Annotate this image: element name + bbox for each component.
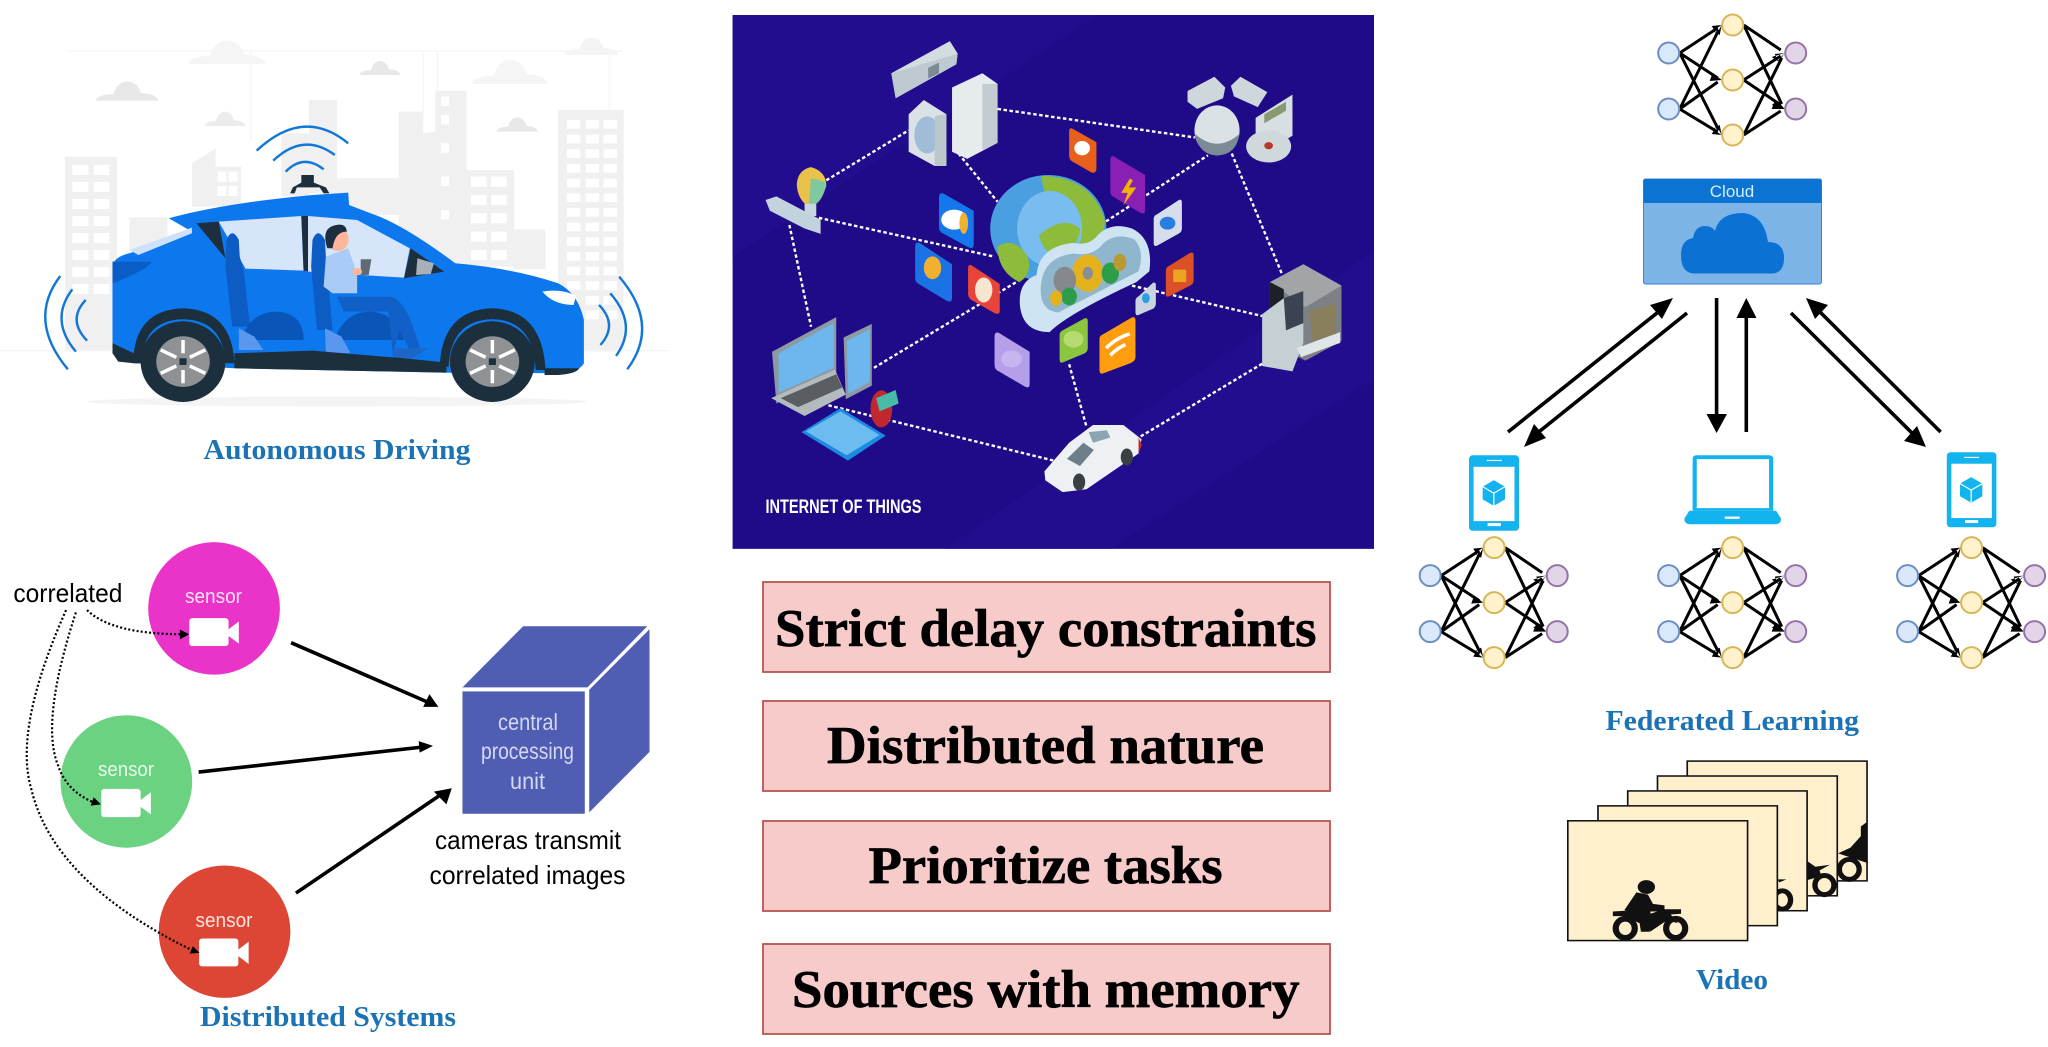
caption: cameras bbox=[430, 825, 626, 890]
cloud with gears bbox=[1020, 226, 1150, 332]
city skyline background bbox=[65, 91, 624, 352]
dotted arrow tips bbox=[91, 630, 200, 954]
cube text: central bbox=[498, 709, 558, 735]
frame 2 bbox=[1598, 806, 1777, 926]
sensor circles bbox=[60, 542, 290, 998]
seats and driver bbox=[225, 225, 429, 358]
data arrows bbox=[199, 643, 442, 893]
arrowheads bbox=[1524, 298, 1926, 447]
panel: autonomous driving bbox=[0, 38, 670, 407]
challenge box: distributed nature: Distributed nature bbox=[827, 717, 1264, 775]
frame 1 bbox=[1568, 821, 1748, 941]
tile glyphs bbox=[924, 141, 1186, 367]
device: laptop bbox=[1684, 455, 1781, 524]
neural network: global model bbox=[1658, 14, 1806, 146]
panel background bbox=[733, 15, 1374, 549]
globe bbox=[990, 175, 1106, 282]
arrowheads bbox=[419, 694, 452, 804]
label: sensor red: sensor bbox=[196, 910, 253, 932]
heading: video: Video bbox=[1696, 965, 1768, 996]
frame 3 bbox=[1628, 791, 1807, 911]
signal waves: roof bbox=[257, 127, 348, 172]
smart lock and safe bbox=[1262, 264, 1341, 371]
camera icons bbox=[101, 618, 249, 966]
signal waves: rear bbox=[45, 276, 87, 369]
caption: cameras: correlated images bbox=[430, 860, 626, 890]
panel: internet of things bbox=[733, 15, 1374, 549]
cloud server bbox=[1644, 179, 1822, 284]
video frames stack bbox=[1568, 761, 1867, 941]
federated exchange arrows bbox=[1508, 298, 1941, 437]
clouds bbox=[0, 38, 670, 351]
smartwatch bbox=[870, 390, 899, 427]
frame 4 bbox=[1657, 776, 1837, 896]
challenge box: prioritize tasks: Prioritize tasks bbox=[868, 837, 1222, 895]
central processing unit cube bbox=[462, 626, 650, 814]
neural network: right client bbox=[1897, 537, 2045, 668]
roof sensor rack bbox=[290, 175, 329, 193]
challenge box: sources with memory: Sources with memory bbox=[792, 961, 1300, 1019]
heading: distributed systems: Distributed Systems bbox=[200, 1001, 456, 1033]
car bbox=[1044, 425, 1142, 492]
label: correlated: correlated bbox=[13, 578, 122, 608]
tablet bbox=[802, 408, 886, 461]
challenge box: prioritize tasks bbox=[763, 821, 1330, 911]
security cameras and panel bbox=[1188, 77, 1292, 162]
challenge box: distributed nature bbox=[763, 701, 1330, 791]
laptop bbox=[771, 317, 846, 416]
heading: federated learning: Federated Learning bbox=[1606, 706, 1859, 737]
headlight and tail detail bbox=[112, 262, 576, 305]
challenge box: sources with memory bbox=[763, 944, 1330, 1034]
device: phone right bbox=[1947, 452, 1996, 527]
correlation dotted links bbox=[27, 610, 194, 951]
light bulbs bbox=[766, 167, 826, 234]
label: sensor green: sensor bbox=[98, 759, 154, 781]
appliances bbox=[891, 41, 998, 166]
signal waves: front bbox=[599, 277, 642, 369]
ground shadow bbox=[87, 397, 587, 407]
label: sensor magenta: sensor bbox=[185, 586, 242, 608]
panel: distributed systems diagram bbox=[27, 542, 650, 998]
challenge box: strict delay constraints bbox=[763, 582, 1330, 672]
neural network: middle client bbox=[1658, 537, 1806, 668]
device: phone left bbox=[1469, 455, 1519, 531]
cube text: processing bbox=[481, 738, 574, 764]
cube text bbox=[481, 709, 574, 794]
car body bbox=[112, 193, 584, 373]
wheel arches and bumpers bbox=[112, 308, 579, 375]
neural network: left client bbox=[1420, 537, 1568, 668]
cube text: unit bbox=[510, 768, 546, 794]
wheels bbox=[141, 321, 535, 402]
caption: cameras: cameras transmit bbox=[435, 825, 622, 855]
app tiles bbox=[915, 128, 1194, 387]
cloud server: Cloud bbox=[1710, 182, 1754, 201]
dashed links bbox=[789, 109, 1282, 461]
heading: autonomous driving: Autonomous Driving bbox=[204, 434, 471, 466]
car windows bbox=[129, 216, 444, 278]
text: internet of things: INTERNET OF THINGS bbox=[766, 497, 922, 518]
challenge box: strict delay constraints: Strict delay constraints bbox=[775, 600, 1316, 658]
smartphone bbox=[844, 324, 872, 399]
frame 5 bbox=[1687, 761, 1867, 881]
